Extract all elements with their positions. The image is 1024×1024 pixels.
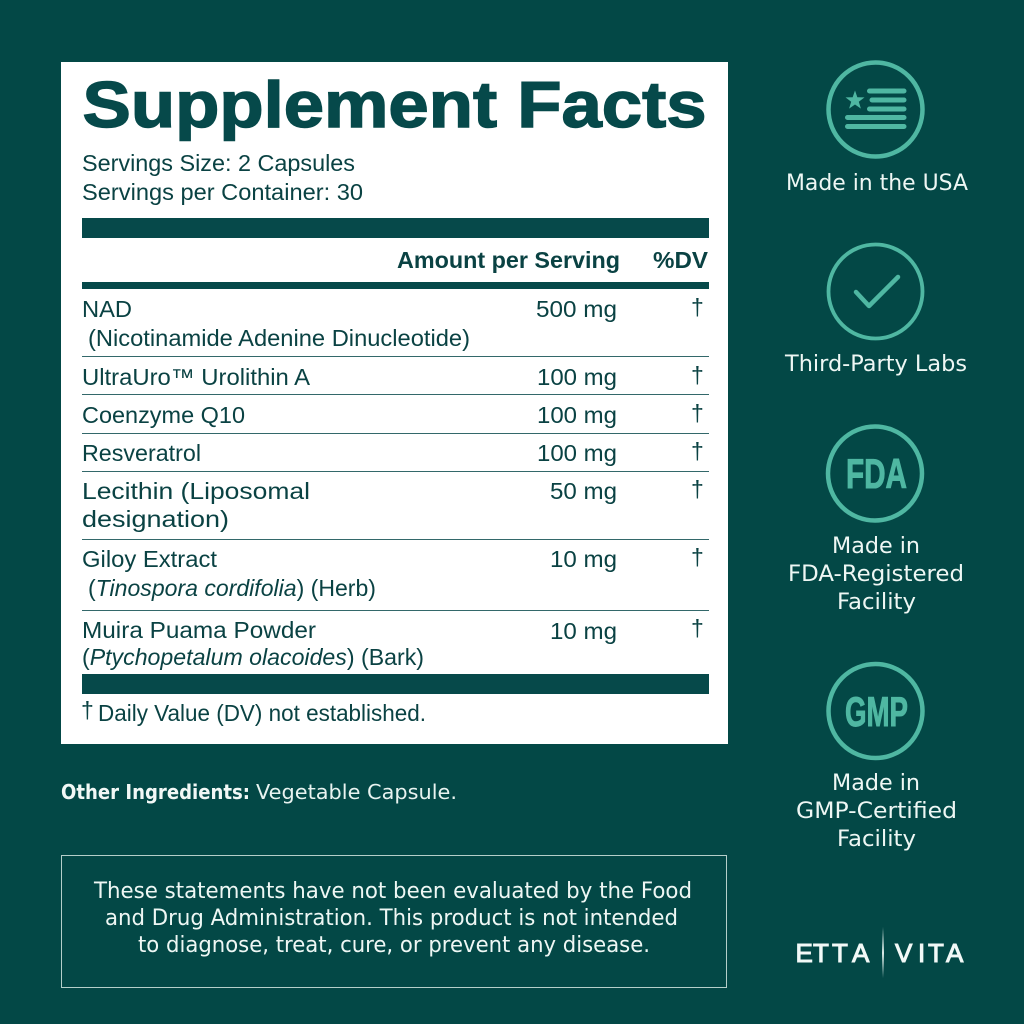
row: UltraUro Urolithin A: UltraUro™ Urolithin A: [82, 364, 311, 390]
row: Giloy Extract: (Tinospora cordifolia) (Herb): [88, 575, 376, 601]
table header: Amount per Serving: [397, 247, 620, 273]
row: Muira Puama Powder: (Ptychopetalum olacoides) (Bark): [82, 644, 424, 670]
disclaimer box: to diagnose, treat, cure, or prevent any disease.: [138, 933, 650, 958]
other ingredients: [61, 780, 457, 804]
row: Resveratrol: 100 mg: [537, 440, 617, 466]
badge: FDA-Registered Facility: Made in: [832, 534, 920, 559]
footnote: Daily Value (DV) not established.: [98, 700, 426, 726]
icon: GMP in circle: GMP: [845, 688, 908, 735]
disclaimer box: and Drug Administration. This product is not intended: [105, 906, 678, 931]
row: Muira Puama Powder: Muira Puama Powder: [82, 617, 316, 643]
badge: GMP-Certified Facility: Facility: [837, 827, 916, 852]
row: Muira Puama Powder: †: [691, 615, 704, 641]
row: UltraUro Urolithin A: 100 mg: [537, 364, 617, 390]
badge: Third-Party Labs: Third-Party Labs: [784, 352, 967, 377]
badge: GMP-Certified Facility: [796, 664, 957, 852]
header rule: [82, 282, 709, 289]
row: Lecithin: Lecithin (Liposomal: [82, 478, 310, 504]
row: Coenzyme Q10: Coenzyme Q10: [82, 402, 245, 428]
badge: FDA-Registered Facility: [788, 426, 964, 615]
icon: flag in circle: [828, 62, 922, 156]
row: Giloy Extract: 10 mg: [550, 546, 617, 572]
row: Resveratrol: Resveratrol: [82, 440, 201, 466]
badge: Made in the USA: [786, 62, 968, 196]
badge: FDA-Registered Facility: Facility: [837, 590, 916, 615]
badge: GMP-Certified Facility: Made in: [832, 771, 920, 796]
row: UltraUro Urolithin A: †: [691, 362, 704, 388]
row: Lecithin: †: [691, 476, 704, 502]
bottom thick bar: [82, 674, 709, 694]
icon: FDA in circle: [828, 426, 922, 520]
other ingredients: Vegetable Capsule.: [256, 780, 457, 804]
row: Lecithin: [82, 476, 704, 532]
row: NAD: †: [691, 294, 704, 320]
row: Giloy Extract: [82, 544, 704, 601]
badge: FDA-Registered Facility: FDA-Registered: [788, 562, 964, 587]
serving information: Servings Size: 2 Capsules: [82, 150, 355, 176]
badge: Third-Party Labs: [784, 244, 967, 377]
row: Lecithin: designation): [82, 506, 229, 532]
row: Resveratrol: †: [691, 438, 704, 464]
row: Resveratrol: [82, 438, 704, 466]
heading: Supplement Facts: Supplement Facts: [82, 68, 706, 141]
icon: FDA in circle: FDA: [846, 450, 907, 497]
serving information: [82, 150, 363, 205]
other ingredients: Other Ingredients:: [61, 780, 250, 804]
logo: Etta Vita: ETTA: [796, 938, 870, 968]
serving information: Servings per Container: 30: [82, 179, 363, 205]
row: UltraUro Urolithin A: [82, 362, 704, 390]
row: Giloy Extract: Giloy Extract: [82, 546, 218, 572]
logo: Etta Vita: VITA: [895, 938, 964, 968]
row: Coenzyme Q10: [82, 400, 704, 428]
row: NAD: 500 mg: [536, 296, 617, 322]
row: Lecithin: 50 mg: [550, 478, 617, 504]
row: NAD: [82, 294, 704, 351]
table header: %DV: [653, 247, 709, 273]
row: Coenzyme Q10: 100 mg: [537, 402, 617, 428]
row: Coenzyme Q10: †: [691, 400, 704, 426]
row: NAD: (Nicotinamide Adenine Dinucleotide): [88, 325, 470, 351]
row: Muira Puama Powder: 10 mg: [550, 618, 617, 644]
badge: Made in the USA: Made in the USA: [786, 171, 968, 196]
disclaimer box: [62, 856, 726, 988]
row: NAD: NAD: [82, 296, 132, 322]
badge: GMP-Certified Facility: GMP-Certified: [796, 799, 957, 824]
row: Muira Puama Powder: [82, 615, 704, 670]
logo: Etta Vita: [796, 927, 964, 978]
icon: check mark in circle: [828, 244, 922, 338]
row: Giloy Extract: †: [691, 544, 704, 570]
disclaimer box: These statements have not been evaluated by the Food: [93, 879, 692, 904]
top thick bar: [82, 218, 709, 238]
footnote: †: [81, 697, 94, 723]
panel: supplement facts: [61, 62, 728, 744]
icon: GMP in circle: [828, 664, 922, 758]
